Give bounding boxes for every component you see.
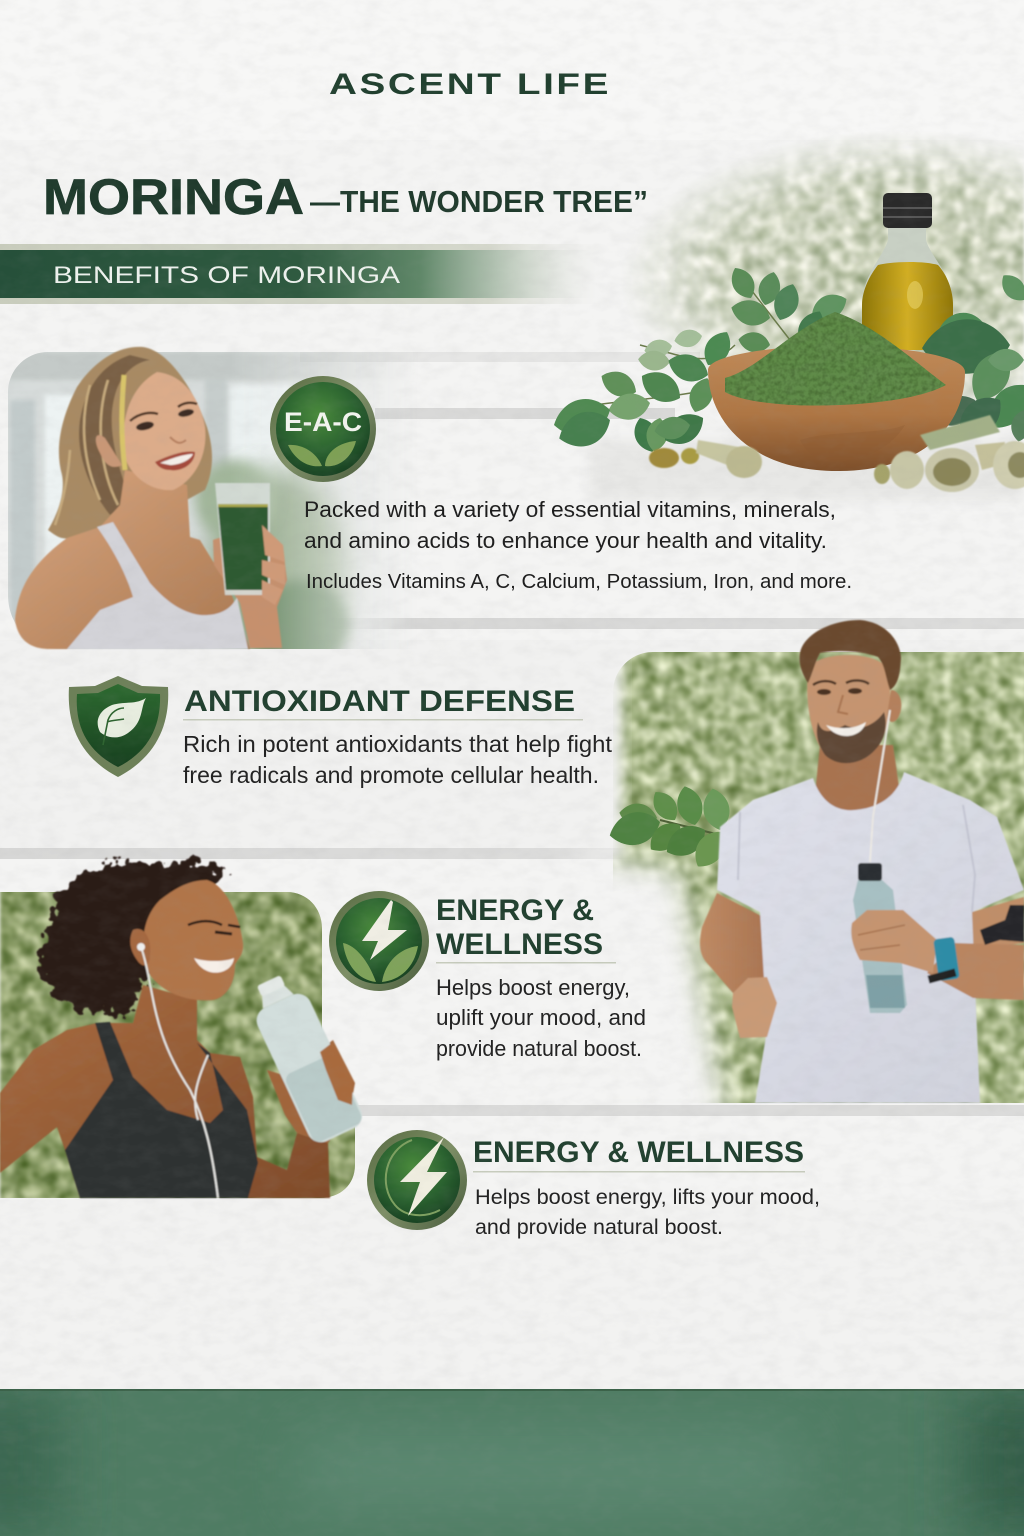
footer green band <box>0 1389 1024 1536</box>
moringa leaves right <box>921 269 1024 446</box>
woman figure <box>15 347 287 649</box>
table surface <box>590 440 1024 500</box>
woman figure <box>0 861 367 1198</box>
green drink glass <box>215 483 270 595</box>
section: antioxidant defense: ANTIOXIDANT DEFENSE <box>184 685 575 718</box>
icon: energy bolt with leaves <box>329 891 429 991</box>
icon: E-A-C badge: E-A-C <box>284 407 362 437</box>
armband <box>980 905 1024 945</box>
main heading: —THE WONDER TREE” <box>310 184 648 219</box>
section: energy and wellness (stacked): WELLNESS <box>436 928 603 961</box>
right forearm <box>927 943 1024 1000</box>
section: energy and wellness (stacked): Helps boost energy, <box>436 975 630 1000</box>
section: energy and wellness (stacked): uplift your mood, and <box>436 1005 646 1030</box>
text block: essential nutrients <box>304 497 852 593</box>
decorative bands <box>0 352 1024 1116</box>
section: antioxidant defense: Rich in potent antioxidants that help fight <box>183 731 613 757</box>
leaf sprig <box>606 783 733 874</box>
panel: woman with water bottle <box>0 861 367 1200</box>
benefits banner: BENEFITS OF MORINGA <box>53 262 400 289</box>
wooden bowl with moringa powder <box>708 312 965 471</box>
fitness watch <box>933 937 960 981</box>
foliage backdrop <box>633 136 1024 400</box>
icon: energy bolt with swirl <box>367 1130 467 1230</box>
section: energy and wellness (stacked): ENERGY & <box>436 894 594 927</box>
panel: woman with green drink <box>8 346 389 650</box>
main heading: MORINGA <box>43 169 304 225</box>
section: energy and wellness (inline): and provide natural boost. <box>475 1216 723 1239</box>
brand name: ASCENT LIFE <box>329 68 611 101</box>
left fist <box>732 977 777 1038</box>
earphone wire <box>142 950 218 1198</box>
benefits banner <box>0 244 610 304</box>
black tank top <box>65 1022 258 1198</box>
hand <box>851 910 937 973</box>
moringa leaves left <box>549 263 851 456</box>
water bottle <box>853 863 907 1013</box>
panel: jogging man <box>610 619 1024 1104</box>
section: energy and wellness (stacked) <box>436 894 646 1061</box>
moringa seeds <box>649 415 1024 492</box>
hand and forearm <box>213 533 287 648</box>
icon: E-A-C badge <box>270 376 376 482</box>
head <box>143 880 243 1000</box>
left arm <box>700 893 770 993</box>
fingers <box>320 1042 353 1105</box>
foliage photo background <box>613 652 1024 1103</box>
section: energy and wellness (inline) <box>473 1136 820 1239</box>
text block: essential nutrients: and amino acids to enhance your health and vitality. <box>304 528 827 553</box>
water bottle <box>242 968 367 1147</box>
section: energy and wellness (inline): Helps boost energy, lifts your mood, <box>475 1186 820 1209</box>
section: energy and wellness (stacked): provide natural boost. <box>436 1036 642 1061</box>
man figure <box>700 620 1024 1103</box>
section: energy and wellness (inline): ENERGY & WELLNESS <box>473 1136 804 1169</box>
curly hair <box>39 861 223 1017</box>
text block: essential nutrients: Includes Vitamins A, C, Calcium, Potassium, Iron, and more. <box>306 571 852 593</box>
body skin <box>0 985 330 1198</box>
foliage photo background <box>0 880 360 1200</box>
photo background <box>8 352 389 649</box>
panel: moringa products image <box>549 120 1024 500</box>
head <box>807 655 890 763</box>
white t-shirt <box>717 772 1024 1103</box>
section: antioxidant defense <box>183 685 613 788</box>
main heading <box>43 169 648 225</box>
forearm and hand <box>267 1040 355 1143</box>
text block: essential nutrients: Packed with a variety of essential vitamins, minerals, <box>304 497 836 522</box>
icon: antioxidant shield <box>69 676 168 777</box>
section: antioxidant defense: free radicals and promote cellular health. <box>183 762 599 788</box>
oil bottle <box>862 193 953 350</box>
